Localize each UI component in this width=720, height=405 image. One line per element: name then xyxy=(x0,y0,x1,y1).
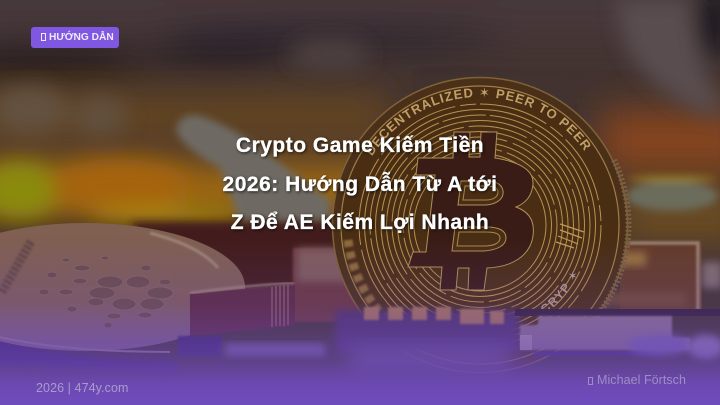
source line: 2026 | 474y.com xyxy=(36,381,128,395)
bitcoin B symbol xyxy=(408,132,533,290)
foreground connector and board strips xyxy=(335,307,720,370)
category badge xyxy=(31,27,119,48)
coin edge lettering: CRYP ✶ xyxy=(541,271,576,309)
title: Crypto Game Kiếm Tiền xyxy=(236,134,484,157)
coin edge lettering xyxy=(366,88,590,309)
coin edge lettering: DECENTRALIZED ✶ PEER TO PEER xyxy=(366,88,590,156)
category badge: HƯỚNG DẪN xyxy=(49,32,114,43)
small silver coin, left xyxy=(0,222,360,372)
title: Z Để AE Kiếm Lợi Nhanh xyxy=(231,211,489,234)
title xyxy=(222,134,499,235)
circuit board components xyxy=(178,242,720,356)
photo credit: Michael Förtsch xyxy=(597,373,686,387)
circuit rings xyxy=(359,104,601,346)
bitcoin coin xyxy=(332,76,632,372)
title: 2026: Hướng Dẫn Từ A tới xyxy=(223,172,497,196)
purple bottom gradient overlay xyxy=(0,240,720,405)
